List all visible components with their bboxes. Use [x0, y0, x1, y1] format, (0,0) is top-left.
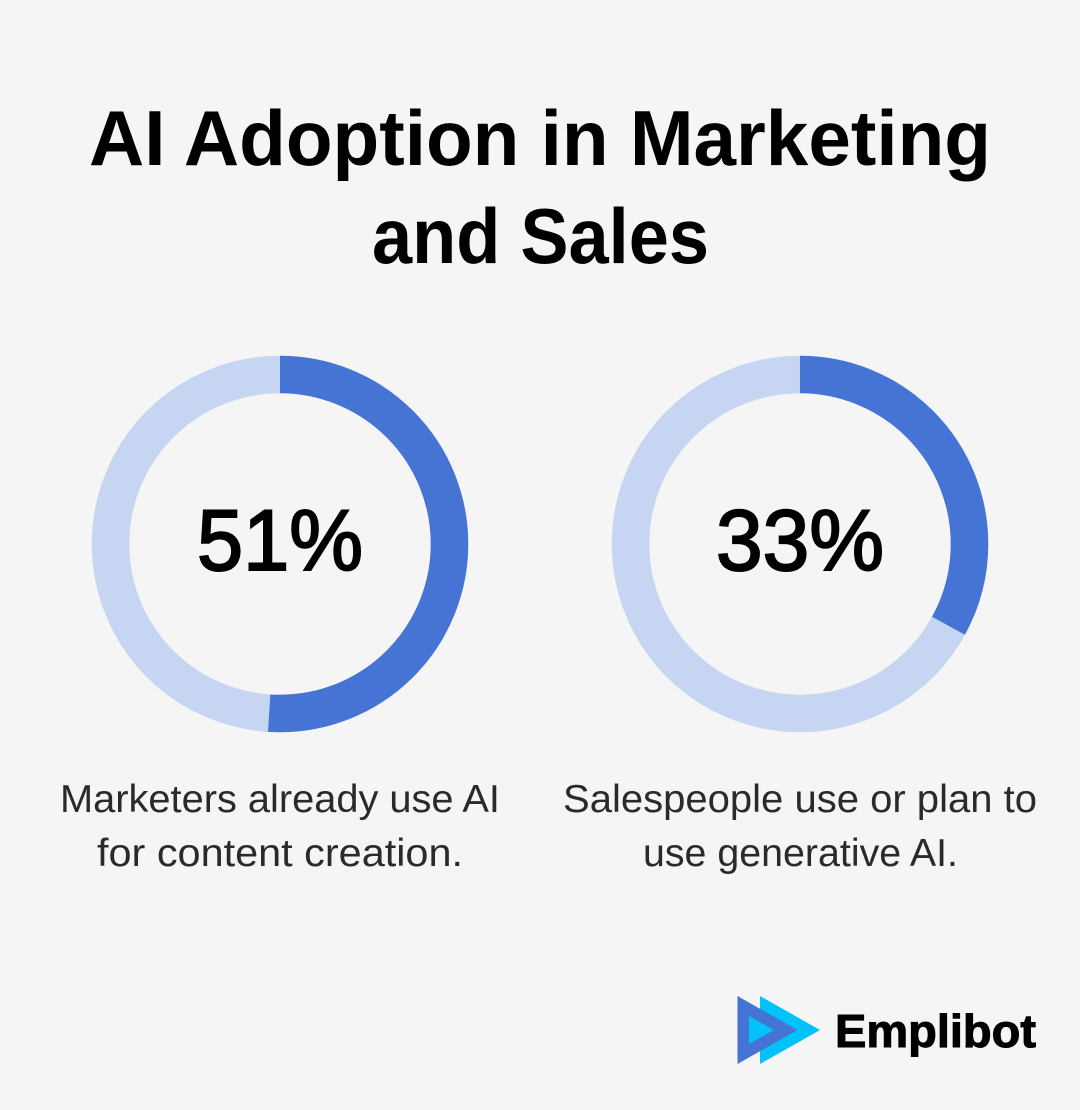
wordmark: Emplibot: [835, 1005, 1036, 1057]
donut chart: 51%: [110, 374, 450, 714]
title: AI Adoption in Marketing: [89, 94, 991, 182]
description: salespeople: [563, 778, 1037, 875]
description: salespeople: use generative AI.: [643, 832, 958, 875]
logo: Emplibot: [738, 996, 1036, 1064]
panel: salespeople stat: [563, 374, 1037, 875]
value: 33%: 33%: [716, 493, 884, 589]
donut chart: 33%: [630, 374, 970, 714]
value: 51%: 51%: [197, 493, 363, 589]
description: marketers: Marketers already use AI: [60, 778, 500, 821]
title: and Sales: [372, 192, 709, 280]
description: marketers: for content creation.: [97, 832, 463, 875]
description: salespeople: Salespeople use or plan to: [563, 778, 1037, 821]
panel: marketers stat: [60, 374, 500, 875]
description: marketers: [60, 778, 500, 875]
title: [89, 94, 991, 280]
icon: play triangles: [738, 996, 820, 1064]
